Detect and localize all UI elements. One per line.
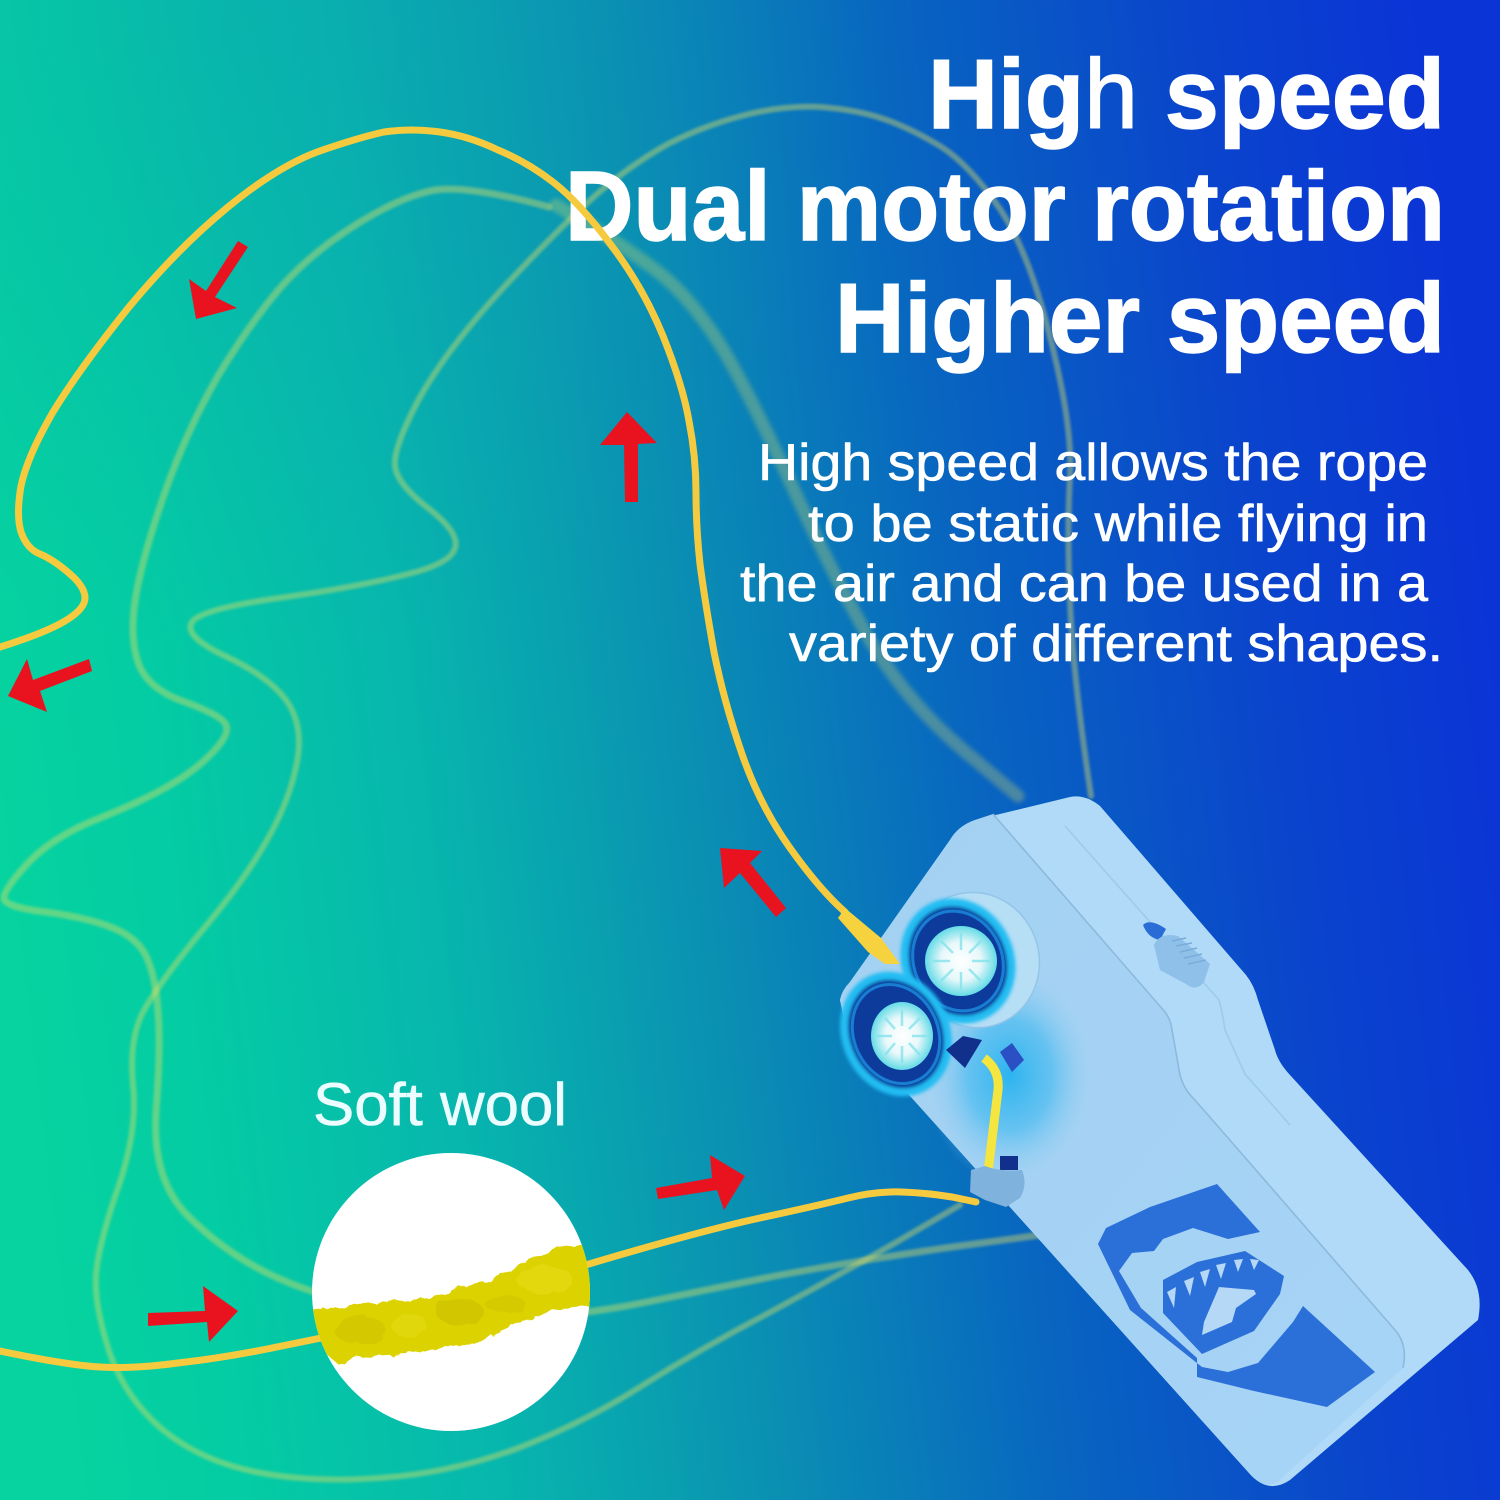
main yellow rope upper loop xyxy=(0,130,845,912)
soft wool magnifier xyxy=(0,1153,976,1431)
arrow up xyxy=(600,412,657,502)
upper spokes xyxy=(933,933,990,990)
inner yellow rope xyxy=(984,1058,998,1172)
red direction arrows xyxy=(8,241,786,1342)
rope bottom section xyxy=(0,1192,976,1368)
shark graphic xyxy=(1098,1184,1375,1407)
body text: the air and can be used in a xyxy=(740,555,1428,613)
body text: variety of different shapes. xyxy=(789,615,1443,673)
switch slot xyxy=(1143,922,1166,940)
upper motor xyxy=(886,885,1030,1037)
arrow bottom left xyxy=(148,1286,238,1342)
shark teeth and tongue xyxy=(1167,1259,1259,1335)
slide switch xyxy=(1143,922,1210,988)
device body xyxy=(840,796,1480,1486)
heading: High speed xyxy=(928,39,1445,149)
front face xyxy=(840,814,1404,1485)
switch slider xyxy=(1154,935,1210,988)
lower motor ring xyxy=(825,958,967,1110)
wool fibre close-up xyxy=(312,1244,595,1363)
heading: Dual motor rotation xyxy=(565,151,1445,261)
rope guide xyxy=(1000,1043,1024,1072)
heading xyxy=(565,39,1445,373)
arrow upper left xyxy=(189,241,248,319)
blue light glow xyxy=(925,965,1095,1185)
white circle xyxy=(312,1153,590,1431)
shark body xyxy=(1098,1184,1375,1407)
body text: to be static while flying in xyxy=(808,495,1428,553)
lower motor disc xyxy=(871,1002,933,1070)
arrow bottom centre xyxy=(656,1155,745,1210)
dark cut-out xyxy=(946,1036,982,1068)
handheld rope launcher device xyxy=(825,796,1480,1486)
shark mouth xyxy=(1163,1251,1284,1354)
clip hole xyxy=(1000,1156,1018,1170)
lower spokes xyxy=(877,1010,927,1063)
heading: Higher speed xyxy=(835,263,1445,373)
body text xyxy=(740,434,1443,673)
lower swirl xyxy=(836,970,956,1098)
upper swirl xyxy=(897,896,1019,1026)
rope clip xyxy=(970,1156,1025,1207)
arrow near device xyxy=(720,848,786,917)
seam lines xyxy=(993,814,1404,1368)
upper motor ring xyxy=(886,885,1030,1037)
soft wool label: Soft wool xyxy=(313,1071,567,1138)
rope entering motors xyxy=(838,908,900,964)
arrow left xyxy=(8,659,92,712)
lower motor xyxy=(825,958,967,1110)
motor housing xyxy=(892,874,1058,1046)
upper motor disc xyxy=(925,926,997,996)
ghost rope trails xyxy=(4,107,1091,1480)
clip body xyxy=(970,1166,1025,1207)
switch ridges xyxy=(1172,938,1206,964)
body text: High speed allows the rope xyxy=(758,434,1428,492)
